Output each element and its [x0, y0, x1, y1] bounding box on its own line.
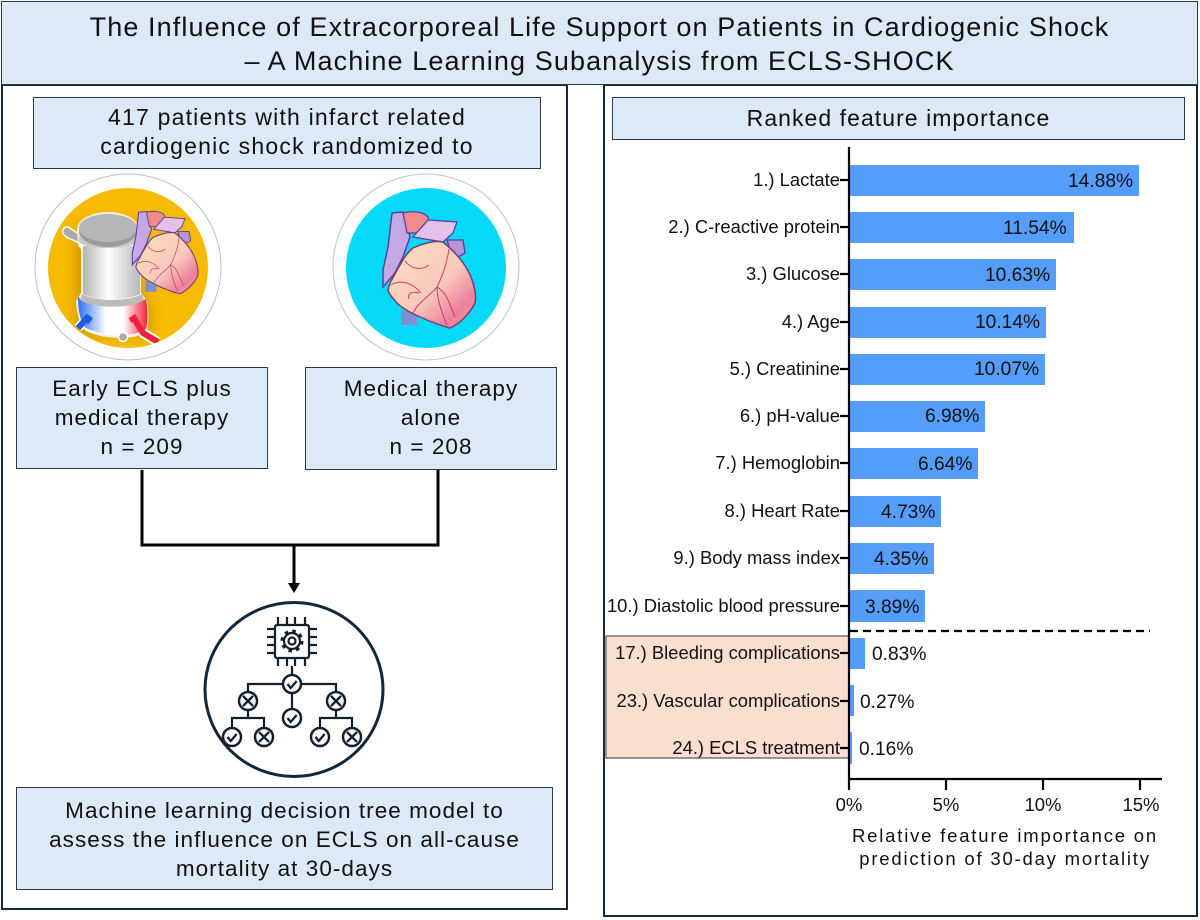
highlight: safety features [606, 636, 849, 758]
value labels [859, 171, 1133, 760]
axis tick labels: 15% [1122, 794, 1160, 815]
category labels: 1.) Lactate [753, 169, 840, 190]
axis tick labels [836, 794, 1160, 815]
axis tick labels: 5% [933, 794, 959, 815]
value labels: 10.63% [985, 265, 1050, 286]
value labels: 0.16% [859, 739, 913, 760]
diagram graphics [34, 147, 1162, 869]
box: ECLS arm: Early ECLS plus [52, 376, 232, 401]
category labels: 17.) Bleeding complications [615, 642, 840, 663]
box: medical arm [305, 367, 557, 470]
box: medical arm: n = 208 [389, 434, 473, 459]
connector arrow [142, 470, 438, 593]
value labels: 6.98% [925, 406, 979, 427]
axis title: Relative feature importance on [852, 825, 1158, 846]
box: decision tree model: mortality at 30-days [176, 856, 393, 881]
heading: patients [33, 97, 541, 169]
axis title: prediction of 30-day mortality [859, 848, 1151, 869]
axis title [852, 825, 1158, 869]
category labels [607, 169, 840, 758]
heading: ranked feature importance: Ranked feature importance [747, 105, 1050, 131]
value labels: 14.88% [1068, 171, 1133, 192]
category labels: 7.) Hemoglobin [715, 452, 840, 473]
value labels: 10.14% [975, 312, 1040, 333]
axis tick labels: 10% [1024, 794, 1062, 815]
category labels: 4.) Age [782, 311, 840, 332]
box: decision tree model: Machine learning decision tree model to [65, 798, 504, 823]
value labels: 0.83% [872, 644, 926, 665]
value labels: 11.54% [1003, 218, 1067, 239]
category labels: 10.) Diastolic blood pressure [607, 595, 840, 616]
icon: decision tree [205, 602, 383, 776]
category labels: 6.) pH-value [740, 405, 840, 426]
value labels: 0.27% [860, 692, 914, 713]
value labels: 3.89% [865, 597, 919, 618]
heading: patients: cardiogenic shock randomized to [100, 133, 474, 159]
bar chart [607, 147, 1162, 869]
title [1, 1, 1198, 85]
category labels: 5.) Creatinine [730, 358, 840, 379]
panel: ranked features [603, 84, 1198, 917]
box: medical arm: alone [401, 405, 461, 430]
value labels: 4.35% [874, 549, 928, 570]
box: decision tree model [16, 787, 553, 890]
category labels: 3.) Glucose [746, 263, 840, 284]
box: medical arm: Medical therapy [344, 376, 518, 401]
value labels: 4.73% [881, 502, 935, 523]
box: ECLS arm: n = 209 [100, 434, 184, 459]
category labels: 2.) C-reactive protein [668, 216, 840, 237]
category labels: 8.) Heart Rate [724, 500, 840, 521]
heading: patients: 417 patients with infarct related [108, 104, 466, 130]
icon: heart on cyan [333, 174, 519, 360]
panel: study design [1, 84, 568, 910]
category labels: 9.) Body mass index [673, 547, 840, 568]
icon: ECLS pump and heart [35, 174, 221, 360]
title: The Influence of Extracorporeal Life Support on Patients in Cardiogenic Shock [90, 12, 1109, 42]
value labels: 10.07% [974, 359, 1039, 380]
box: decision tree model: assess the influence on ECLS on all-cause [49, 827, 520, 852]
category labels: 23.) Vascular complications [616, 690, 840, 711]
box: ECLS arm: medical therapy [55, 405, 229, 430]
bars [849, 165, 1139, 764]
value labels: 6.64% [918, 454, 972, 475]
category labels: 24.) ECLS treatment [672, 737, 840, 758]
box: ECLS arm [16, 367, 268, 469]
heading: ranked feature importance [612, 97, 1185, 140]
axis tick labels: 0% [836, 794, 862, 815]
axes [840, 147, 1162, 790]
title: – A Machine Learning Subanalysis from ECLS-SHOCK [244, 46, 955, 76]
